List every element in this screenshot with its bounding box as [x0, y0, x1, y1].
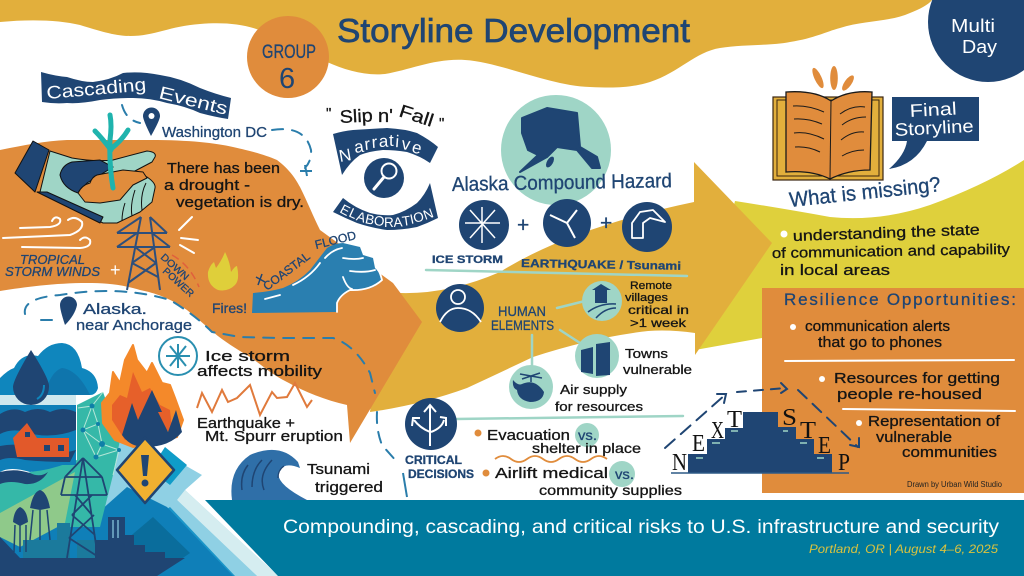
letters: E: [692, 431, 705, 457]
subtitle: Compounding, cascading, and critical risks to U.S. infrastructure and security: [283, 516, 999, 538]
decision: evacuation: vs.: [578, 427, 597, 443]
item: alerts: that go to phones: [818, 334, 942, 351]
letters: E: [818, 433, 831, 459]
decision: evacuation: [474, 423, 641, 456]
credit: text: Drawn by Urban Wild Studio: [907, 480, 1003, 489]
heading: what is missing: What is missing?: [788, 173, 942, 212]
icon: village: [582, 281, 622, 321]
text: tsunami: Tsunami: [307, 461, 370, 478]
item: representation: Representation of: [868, 413, 1001, 430]
text: missing item: of communication and capability: [772, 242, 1011, 262]
rays: [810, 66, 856, 92]
arrows: next step path: [665, 383, 859, 448]
panel: resilience opportunities: [762, 288, 1024, 493]
text: air supply: [555, 382, 644, 414]
decision: airlift: vs.: [615, 466, 634, 482]
text: ice storm: Ice storm: [205, 348, 290, 365]
text: air supply: Air supply: [560, 382, 628, 397]
label: coastal flood: COASTAL: [260, 249, 313, 293]
text: air supply: for resources: [555, 399, 644, 414]
label: coastal flood: [256, 228, 358, 293]
letters: T: [727, 407, 742, 433]
location: alaska: Alaska.: [83, 301, 147, 318]
icon: warning sign: [117, 438, 174, 503]
text: missing item: understanding the state: [793, 221, 980, 245]
icon: ice ring: [159, 337, 197, 375]
label: tropical storm winds: TROPICAL: [20, 252, 85, 267]
label: human elements: ELEMENTS: [491, 317, 554, 333]
item: alerts: communication alerts: [805, 318, 950, 335]
band below cloud: [0, 395, 76, 408]
text: missing item: in local areas: [780, 262, 890, 279]
buildings light: [23, 523, 95, 558]
text: drought: [164, 160, 304, 211]
quote: slip n fall: [326, 101, 444, 132]
cloud: [0, 343, 98, 395]
letters: P: [838, 450, 850, 476]
callout: final storyline: [889, 97, 979, 169]
footer banner: [205, 500, 1024, 576]
plus: +: [600, 212, 612, 235]
icon: spark rays: [179, 217, 198, 253]
label: tropical storm winds: STORM WINDS: [5, 264, 100, 279]
badge: multi day: [928, 0, 1024, 82]
letters: S: [782, 405, 797, 431]
label: tropical storm winds: [5, 252, 100, 279]
icon: alaska pin: [60, 296, 77, 325]
icon: helicopter: [509, 365, 553, 409]
icon: tsunami: [622, 202, 672, 252]
badge: multi day: Day: [962, 37, 997, 57]
letters: [672, 405, 850, 476]
label: DECISIONS: [408, 467, 474, 481]
decision: airlift: Airlift medical: [495, 465, 608, 482]
icon: tsunami wave: [231, 450, 307, 500]
chart: seismic line: [197, 383, 312, 415]
text: drought: There has been: [167, 160, 280, 177]
badge: group 6: [247, 16, 329, 98]
icon: person: [436, 284, 484, 332]
text: towns vulnerable: [623, 346, 692, 377]
icon: ice storm: [459, 200, 509, 250]
text: ice storm: affects mobility: [197, 363, 323, 380]
text: tsunami: triggered: [315, 479, 383, 496]
item: representation: [856, 413, 1001, 461]
decision: evacuation: shelter in place: [532, 440, 641, 456]
heading: alaska compound hazard: Alaska Compound Hazard: [452, 170, 672, 196]
badge: group 6: GROUP: [262, 42, 316, 63]
labels: hazards: [432, 254, 681, 273]
label: down power: POWER: [160, 266, 196, 300]
stripes: [0, 440, 278, 576]
item: alerts: [790, 318, 950, 351]
labels: hazards: ICE STORM: [432, 254, 503, 266]
text: drought: a drought -: [164, 177, 250, 194]
quote: slip n fall: n': [378, 106, 393, 126]
hazard icons: [459, 199, 672, 252]
icon: rain drop: [13, 350, 49, 405]
badge: group 6: 6: [279, 63, 295, 95]
network: [78, 392, 119, 475]
icon: earthquake: [543, 199, 591, 247]
location: alaska: near Anchorage: [76, 317, 192, 334]
text: earthquake: [197, 415, 343, 445]
critical decisions: [405, 398, 682, 498]
icon: pin: [143, 108, 160, 136]
next step stairs: [665, 383, 859, 476]
plus: +: [110, 260, 121, 280]
icon: fire: [208, 252, 238, 290]
location: washington dc: [122, 105, 312, 176]
icon: power tower: [117, 217, 170, 290]
badge: multi day: Multi: [951, 16, 995, 36]
text: ice storm: [197, 348, 323, 380]
heading: Resilience Opportunities:: [784, 290, 1016, 309]
title: Storyline Development: [337, 12, 690, 49]
text: remote villages: [625, 280, 689, 330]
icon: branching arrows: [405, 398, 457, 450]
gold flow arrow: [370, 162, 772, 412]
labels: hazards: EARTHQUAKE / Tsunami: [521, 258, 681, 273]
text: tsunami: [307, 461, 383, 496]
label: [405, 453, 474, 481]
label: CRITICAL: [405, 453, 462, 467]
banner: elaboration: ELABORATION: [338, 201, 435, 230]
quote: slip n fall: Fall: [397, 101, 436, 131]
location: alaska: [25, 291, 407, 497]
illustration: regional hazards: [0, 343, 278, 576]
text: remote villages: Remote: [630, 280, 672, 292]
icon: hand holding seedling: [15, 115, 155, 223]
item: resources: [819, 370, 1000, 403]
text: remote villages: >1 week: [630, 316, 687, 330]
quote: slip n fall: Slip: [339, 105, 373, 127]
letters: T: [800, 418, 816, 444]
callout: final storyline: Storyline: [894, 116, 974, 140]
label: fires: Fires!: [212, 300, 247, 316]
label: down power: [158, 252, 199, 300]
location and date: Portland, OR | August 4–6, 2025: [809, 542, 998, 556]
label: coastal flood: FLOOD: [313, 228, 358, 252]
cascading events banner: [41, 72, 231, 119]
icon: towns: [575, 334, 619, 378]
label: human elements: HUMAN: [498, 303, 546, 319]
decision: airlift: [482, 461, 682, 498]
item: resources: people re-housed: [837, 386, 982, 403]
text: towns vulnerable: vulnerable: [623, 362, 692, 377]
icon: coastal flood wave: [252, 243, 382, 313]
text: towns vulnerable: Towns: [625, 346, 669, 361]
cascading events banner: Events: [157, 82, 230, 119]
plus: +: [517, 214, 529, 237]
narrative heading group: [326, 101, 444, 230]
orange flow arrow: [0, 140, 422, 443]
quote: slip n fall: ": [439, 115, 444, 132]
icon: wildfire with trees: [102, 345, 183, 447]
text: drought: vegetation is dry.: [176, 194, 304, 211]
top wave band: [0, 0, 932, 87]
flood water: [0, 405, 76, 484]
text: missing item: [772, 221, 1011, 279]
map: alaska: [501, 95, 611, 205]
city skyline: [0, 490, 185, 576]
item: representation: communities: [902, 444, 997, 461]
banner: narrative: Narrative: [337, 131, 424, 166]
green hillside: [0, 472, 75, 547]
item: resources: Resources for getting: [834, 370, 1000, 387]
icon: house: [13, 423, 69, 457]
label: human elements: [491, 303, 554, 333]
text: remote villages: villages: [625, 292, 669, 304]
yellow band behind final storyline: [695, 160, 1024, 350]
location: washington dc: Washington DC: [162, 124, 267, 141]
teal panel: [0, 392, 120, 540]
callout: final storyline: Final: [909, 99, 957, 121]
decision: evacuation: Evacuation: [487, 427, 570, 444]
icon: wind: [3, 217, 90, 248]
letters: X: [711, 418, 724, 444]
text: remote villages: critical in: [628, 303, 689, 317]
human elements: [436, 280, 692, 414]
cascading events banner: Cascading: [46, 74, 147, 103]
letters: N: [672, 450, 687, 476]
text: earthquake: Earthquake +: [197, 415, 295, 432]
icon: magnifier: [364, 158, 404, 198]
decision: airlift: community supplies: [539, 482, 682, 498]
text: earthquake: Mt. Spurr eruption: [205, 428, 343, 445]
label: down power: DOWN: [158, 252, 191, 283]
quote: slip n fall: ": [326, 105, 331, 122]
item: representation: vulnerable: [876, 429, 952, 446]
icon: open book: [773, 66, 883, 180]
icon: transmission tower: [61, 458, 107, 558]
